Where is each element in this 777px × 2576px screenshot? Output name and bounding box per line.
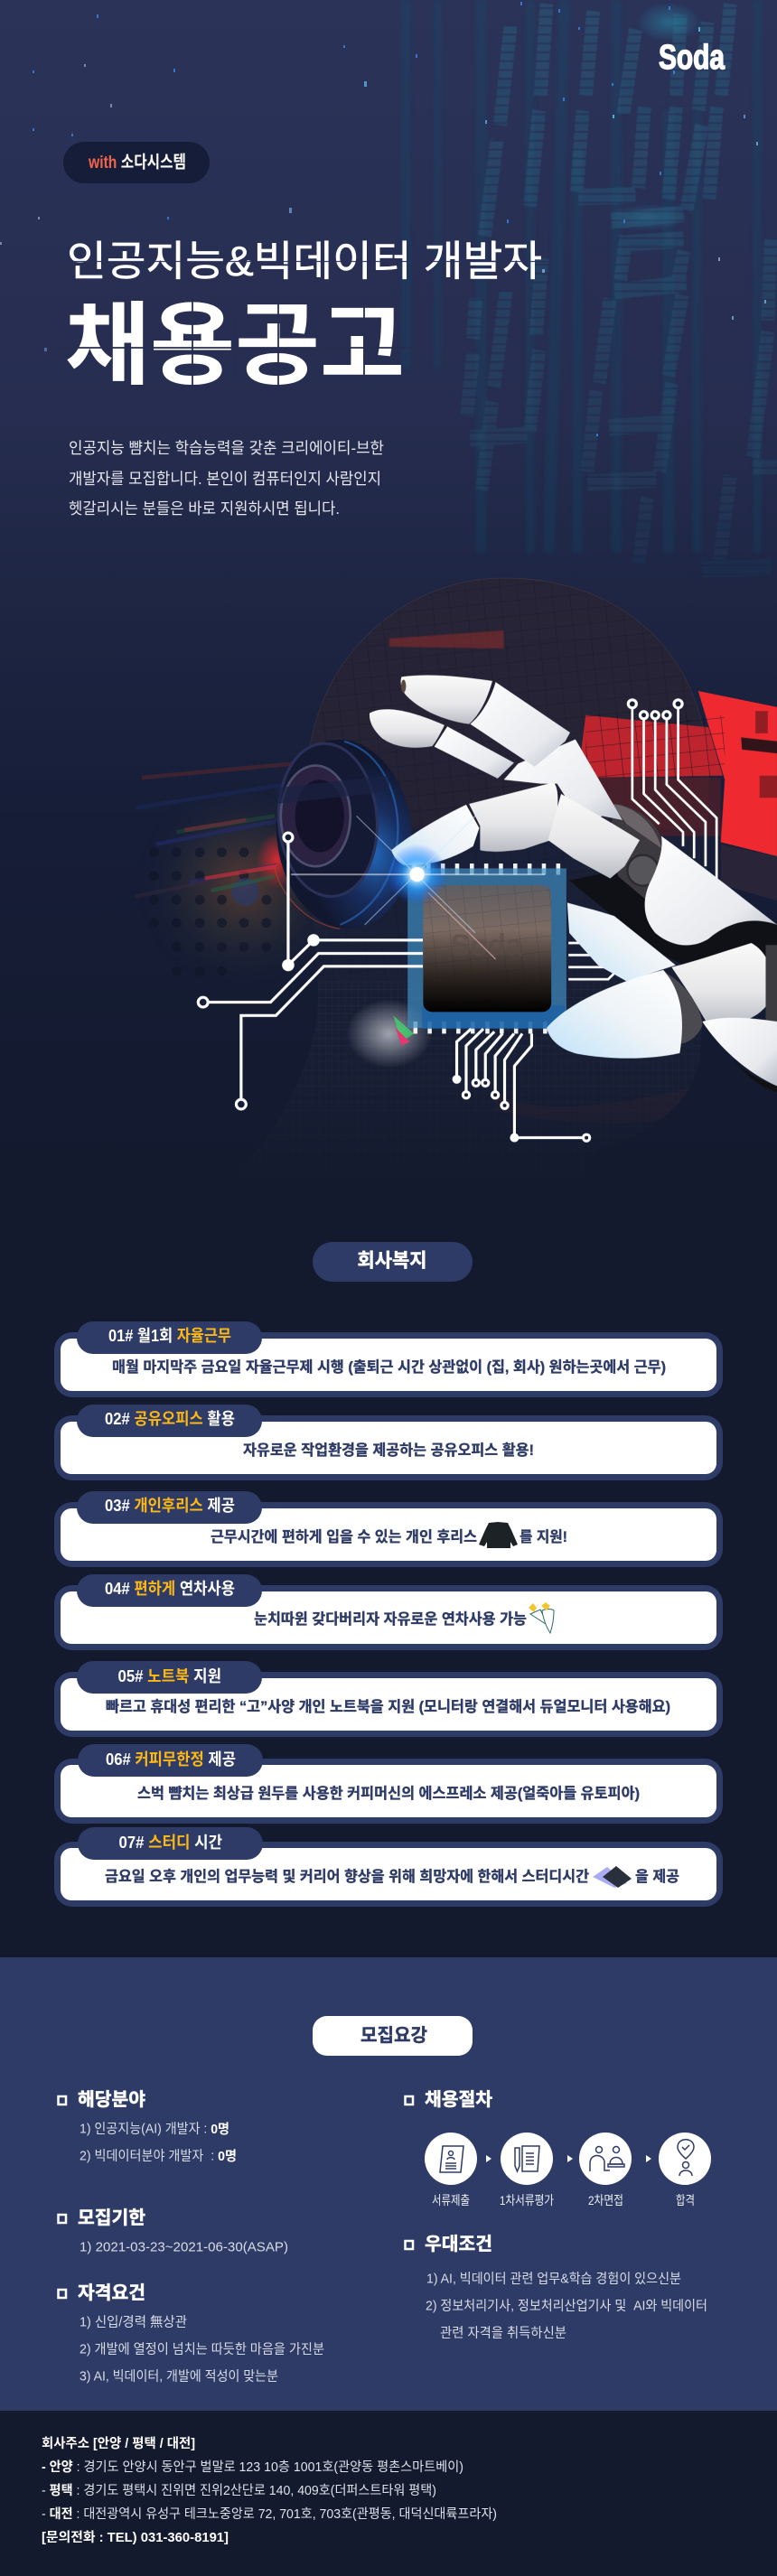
section: 모집기한: 모집기한	[78, 2207, 145, 2228]
card 04: 눈치따윈 갖다버리자 자유로운 연차사용 가능	[254, 1610, 527, 1628]
step 3: 2차면접	[579, 2133, 632, 2185]
upper finger	[401, 676, 492, 724]
arrow	[486, 2155, 491, 2162]
intro text: 개발자를 모집합니다. 본인이 컴퓨터인지 사람인지	[69, 470, 381, 488]
section: 우대조건: 관련 자격을 취득하신분	[440, 2325, 566, 2341]
step 4: 합격	[659, 2133, 711, 2185]
heading: 모집요강	[313, 2016, 473, 2056]
heading: 회사복지	[313, 1242, 473, 1282]
circuit lines	[198, 700, 716, 1143]
step 2: 1차서류평가	[501, 2133, 553, 2185]
background: star particles	[0, 2, 766, 436]
section: 자격요건: 자격요건	[78, 2282, 145, 2303]
footer text: company addresses: - 평택 : 경기도 평택시 진위면 진위2산단로 140, 409호(더퍼스트타워 평택)	[42, 2483, 436, 2498]
red band	[582, 691, 777, 901]
second finger	[370, 709, 445, 748]
section: 해당분야	[58, 2089, 237, 2164]
knuckle connector	[504, 740, 623, 828]
arrow	[567, 2155, 573, 2162]
section: 자격요건: 2) 개발에 열정이 넘치는 따듯한 마음을 가진분	[80, 2341, 324, 2357]
section: 해당분야: 2) 빅데이터분야 개발자 : 0명	[80, 2148, 237, 2164]
footer text: company addresses: 회사주소 [안양 / 평택 / 대전]	[42, 2436, 195, 2451]
section: 채용절차: 서류제출	[432, 2193, 470, 2207]
section: 우대조건	[405, 2234, 707, 2341]
dark inner mechanics	[569, 868, 777, 985]
footer text: company addresses: - 대전 : 대전광역시 유성구 테크노중앙로 72, 701호, 703호(관평동, 대덕신대륙프라자)	[42, 2506, 497, 2522]
card 04	[54, 1574, 723, 1650]
head outline	[307, 578, 708, 779]
section: 모집기한	[58, 2207, 288, 2254]
footer text: company addresses: [문의전화 : TEL) 031-360-8191]	[42, 2530, 229, 2545]
icon: book	[593, 1866, 632, 1888]
section: 우대조건: 1) AI, 빅데이터 관련 업무&학습 경험이 있으신분	[426, 2271, 681, 2287]
intro text	[69, 439, 384, 518]
robot hand	[370, 676, 777, 1092]
footer text: company addresses: - 안양 : 경기도 안양시 동안구 벌말로 123 10층 1001호(관양동 평촌스마트베이)	[42, 2459, 463, 2475]
title: 인공지능&빅데이터 개발자: 인공지능&빅데이터 개발자	[67, 238, 542, 285]
illustration: robot hand holding chip over mesh head	[136, 578, 777, 1143]
background: digital segment pattern	[461, 3, 777, 550]
section: 해당분야: 해당분야	[78, 2089, 145, 2110]
card 06: 06# 커피무한정 제공	[106, 1750, 236, 1769]
chip logo: Soda	[451, 929, 523, 963]
neck lit mesh	[346, 999, 432, 1068]
card 07: 금요일 오후 개인의 업무능력 및 커리어 향상을 위해 희망자에 한해서 스터디시간	[105, 1868, 589, 1885]
section: 우대조건: 우대조건	[425, 2234, 492, 2254]
section: 채용절차	[405, 2089, 711, 2207]
background: dark navy gradient	[0, 0, 777, 1174]
card 02: 02# 공유오피스 활용	[105, 1410, 235, 1428]
card 07	[54, 1827, 723, 1907]
card 01: 01# 월1회 자율근무	[108, 1327, 231, 1345]
section: 우대조건: 2) 정보처리기사, 정보처리산업기사 및 AI와 빅데이터	[426, 2298, 707, 2314]
card 07: 07# 스터디 시간	[119, 1834, 222, 1852]
card 06	[54, 1744, 723, 1824]
badge: with 소다시스템	[63, 142, 210, 183]
panel: footer	[0, 2411, 777, 2576]
mesh head	[293, 578, 708, 1124]
card 05	[54, 1661, 723, 1737]
panel: 모집요강	[0, 1957, 777, 2411]
card 06: 스벅 뺨치는 최상급 원두를 사용한 커피머신의 에스프레소 제공(얼죽아들 유토피아)	[137, 1784, 640, 1802]
section: 해당분야: 1) 인공지능(AI) 개발자 : 0명	[80, 2121, 229, 2137]
intro text: 헷갈리시는 분들은 바로 지원하시면 됩니다.	[69, 499, 340, 518]
chip pins	[412, 863, 560, 1033]
section: 자격요건: 1) 신입/경력 無상관	[80, 2314, 187, 2330]
camera lens	[267, 733, 421, 935]
card 02	[54, 1405, 723, 1480]
third finger	[391, 805, 479, 865]
badge: with 소다시스템: with 소다시스템	[88, 152, 186, 172]
card 03	[54, 1491, 723, 1567]
chip	[407, 863, 566, 1033]
heading: 모집요강: 모집요강	[360, 2025, 427, 2046]
palm and thumb	[567, 902, 676, 981]
card 03: 03# 개인후리스 제공	[105, 1497, 235, 1515]
card 02: 자유로운 작업환경을 제공하는 공유오피스 활용!	[243, 1442, 534, 1459]
card 05: 빠르고 휴대성 편리한 “고”사양 개인 노트북을 지원 (모니터랑 연결해서 듀얼모니터 사용해요)	[106, 1697, 670, 1715]
dotted panel	[149, 847, 271, 976]
icon: carrots	[529, 1602, 554, 1633]
card 05: 05# 노트북 지원	[117, 1667, 221, 1685]
card 01	[54, 1321, 723, 1397]
glow: orange behind lens	[137, 779, 351, 989]
lens flare	[291, 807, 545, 933]
icon: jacket	[479, 1522, 518, 1548]
section: 모집기한: 1) 2021-03-23~2021-06-30(ASAP)	[80, 2240, 288, 2254]
section: 채용절차: 1차서류평가	[500, 2193, 554, 2207]
section: 자격요건: 3) AI, 빅데이터, 개발에 적성이 맞는분	[80, 2368, 278, 2385]
logo: Soda: Soda	[659, 39, 726, 77]
card 03: 를 지원!	[520, 1528, 567, 1545]
panel: 회사복지	[0, 1174, 777, 1957]
heading: 회사복지: 회사복지	[358, 1250, 426, 1272]
title: 채용공고: 채용공고	[65, 295, 405, 397]
step 1: 서류제출	[425, 2133, 477, 2185]
section: 자격요건	[58, 2282, 324, 2385]
arm shell	[645, 836, 777, 946]
section: 채용절차: 합격	[676, 2193, 695, 2207]
card 03: 근무시간에 편하게 입을 수 있는 개인 후리스	[211, 1528, 477, 1545]
card 04: 04# 편하게 연차사용	[105, 1580, 235, 1598]
card 07: 을 제공	[635, 1868, 679, 1885]
arrow	[646, 2155, 651, 2162]
section: 채용절차: 2차면접	[588, 2193, 623, 2207]
footer text: company addresses	[42, 2436, 497, 2545]
glitch stripes	[136, 763, 295, 897]
intro text: 인공지능 뺨치는 학습능력을 갖춘 크리에이티-브한	[69, 439, 384, 457]
card 01: 매월 마지막주 금요일 자율근무제 시행 (출퇴근 시간 상관없이 (집, 회사) 원하는곳에서 근무)	[112, 1358, 666, 1376]
section: 채용절차: 채용절차	[425, 2089, 492, 2110]
